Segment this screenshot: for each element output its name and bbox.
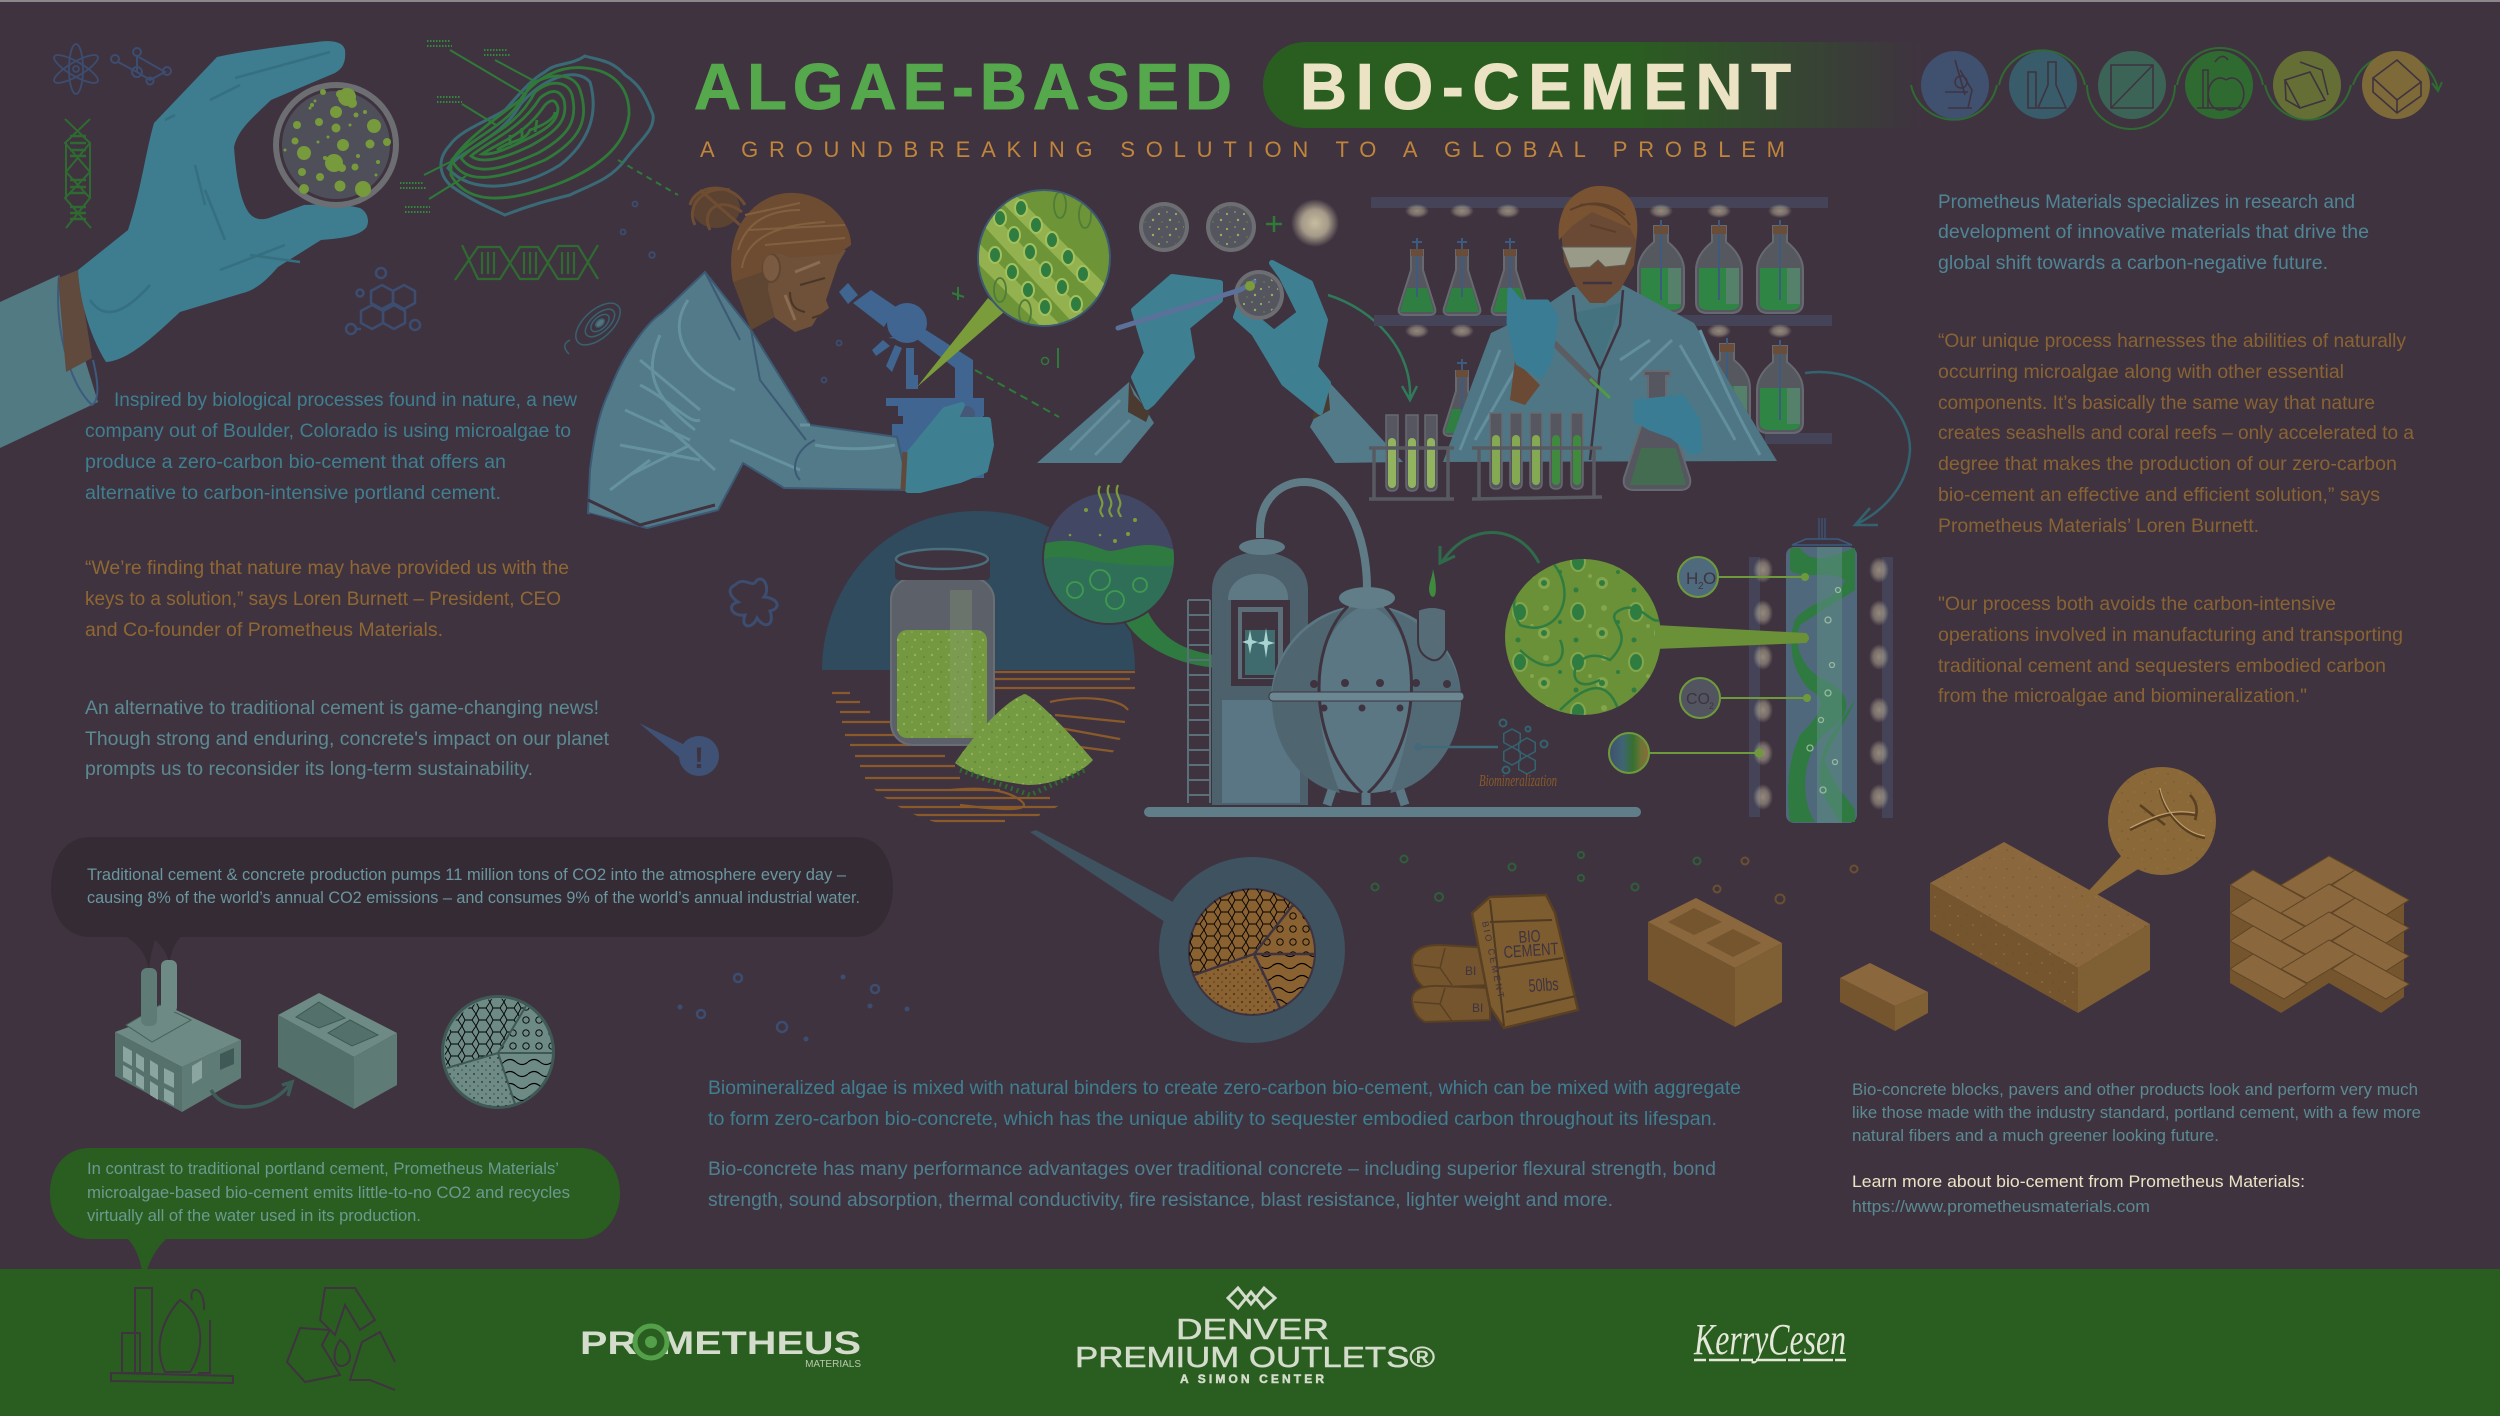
paragraph: about prometheus: global shift towards a carbon-negative future. [1938,253,2328,274]
paragraph: biomineralized [708,1078,1741,1130]
paragraph: quote: “We’re finding that nature may have provided us with the [85,558,569,579]
icon: reactor plant [2185,51,2253,119]
logo: prometheus: MATERIALS [805,1359,861,1370]
dashed line: cell to microscope bubble [618,160,678,195]
paragraph: intro: company out of Boulder, Colorado is using microalgae to [85,421,571,442]
big brick [1930,842,2150,1013]
coat [1443,285,1777,462]
logo: prometheus: PR METHEUS [580,1325,861,1361]
algae tail [1655,625,1809,649]
arrow: algae to reactor [1440,532,1539,563]
quote: process both [1938,594,2403,707]
arrow: shelves to column [1805,372,1910,525]
paragraph: game-changing: An alternative to traditional cement is game-changing news! [85,698,599,719]
bags of bio cement [1412,895,1578,1028]
micro labels [400,41,510,212]
lab illustration: gloved hand with petri dish [0,41,399,448]
paragraph: intro [85,390,577,504]
petri dish [273,82,399,208]
test tube rack 2 [1472,413,1602,499]
paragraph: about prometheus: development of innovative materials that drive the [1938,222,2369,243]
quote: unique process: components. It’s basically the same way that nature [1938,393,2375,414]
bags of bio cement: 50lbs [1528,974,1559,996]
smoke tails [125,936,182,970]
icon: atom [51,44,101,94]
speech bubble tail [917,298,1004,387]
process icon row [1911,48,2442,129]
hands with swab and petri [1037,199,1417,463]
line: CO2 [1720,697,1807,699]
logo: denver premium outlets: DENVER [1176,1314,1329,1346]
drop [1429,569,1436,597]
subtitle: A GROUNDBREAKING SOLUTION TO A GLOBAL PROBLEM [700,137,1785,162]
cuff [58,270,92,372]
logo: denver premium outlets [1075,1288,1435,1386]
label: H2O: O [1703,569,1716,588]
arrow: petri to tubes [1328,295,1417,400]
paragraph: game-changing: prompts us to reconsider its long-term sustainability. [85,759,533,780]
bio-cement products row [1030,767,2409,1043]
icon: spiral cell [565,296,627,354]
quote: process both: from the microalgae and biomineralization." [1938,686,2307,707]
title pill [1263,42,1923,128]
footer band [0,1269,2500,1416]
quote: unique process [1938,331,2414,537]
logo: kerry cesen: KerryCesen [1693,1315,1846,1364]
petri dish 2 [1206,202,1256,252]
glove on microscope [908,405,991,490]
paragraph: advantages [708,1159,1716,1211]
quote: unique process: occurring microalgae along with other essential [1938,362,2344,383]
right glove [1236,263,1328,412]
side tank [1418,607,1446,660]
right sleeve [1310,383,1403,463]
factory to block illustration [115,960,910,1112]
pipe [1260,482,1367,588]
paragraph: quote [85,558,569,641]
ladder [1188,600,1210,803]
microscope [839,283,984,478]
quote: unique process: bio-cement an effective and efficient solution,” says [1938,485,2380,506]
lens [1159,857,1345,1043]
label: H2O: 2 [1698,581,1704,592]
photobioreactor [1505,518,1893,823]
small rings [620,202,887,382]
small bag upper [1412,945,1490,988]
sleeve [0,275,98,448]
quote: process both: traditional cement and sequesters embodied carbon [1938,656,2386,677]
quote: unique process: Prometheus Materials’ Loren Burnett. [1938,516,2259,537]
liquid bubble tail [1122,610,1251,669]
cell callout lines [424,50,536,199]
label: CO2 [1680,678,1720,718]
paragraph: look and perform [1852,1080,2421,1145]
logo: denver premium outlets: PREMIUM OUTLETS® [1075,1342,1435,1374]
liquid bubble [1042,493,1174,625]
shelves [1371,197,1832,444]
cell wavy outer wall [441,56,653,215]
sparkles [1242,628,1275,658]
floating particles [1372,852,1858,904]
center paragraphs [708,1078,1741,1211]
paragraph: intro: produce a zero-carbon bio-cement that offers an [85,452,506,473]
reactor [1144,482,1641,817]
aggregate circle [441,995,555,1109]
title: bio-cement: BIO-CEMENT [1300,50,1791,123]
intro text blocks [85,390,610,780]
microscope view bubble [975,189,1111,335]
factory [115,960,241,1112]
petri dish 1 [1139,202,1189,252]
window [1231,600,1290,686]
left sleeve [1037,382,1154,463]
text: microalgae-based bio-cement emits little-to-no CO2 and recycles [87,1183,570,1202]
paragraph: quote: keys to a solution,” says Loren Burnett – President, CEO [85,589,561,610]
paragraph: look and perform: natural fibers and a much greener looking future. [1852,1126,2219,1145]
green bubble [50,1148,620,1285]
coat hem [588,500,718,536]
test tube rack 1 [1369,415,1454,499]
paragraph: intro: Inspired by biological processes found in nature, a new [114,390,577,411]
arrow factory to block [211,1082,292,1107]
text [87,1159,570,1225]
paragraph: about prometheus [1938,192,2369,274]
mouth [1583,282,1612,284]
swab [1118,282,1254,328]
scientist: man at shelves [1369,186,1910,525]
paragraph: advantages: strength, sound absorption, thermal conductivity, fire resistance, blast resistance, lighter weight and more. [708,1190,1613,1211]
lower right text [1852,1080,2421,1216]
blue backdrop [822,511,1135,670]
small brick [1840,963,1928,1031]
column vessel [1786,518,1857,823]
sphere [1271,605,1461,793]
green culture swirl [1788,548,1855,822]
cell green membranes [451,68,629,198]
face [768,250,846,332]
icon: recycling outline [287,1288,395,1390]
wood grain [832,672,1135,821]
goggles [1562,247,1632,268]
label: biomineralization: Biomineralization [1479,771,1557,790]
ear [762,254,780,282]
molecule biomineral [1500,720,1548,774]
paragraph: game-changing [85,698,610,780]
quote: unique process: “Our unique process harnesses the abilities of naturally [1938,331,2406,352]
big algae circle [1505,559,1661,715]
right column text [1938,192,2414,707]
label: H2O: H [1686,569,1698,588]
legs [1327,790,1405,805]
title block [694,42,1923,162]
bag print: BIO [1518,927,1541,947]
platform [1144,807,1641,817]
title: algae-based: ALGAE-BASED [694,50,1232,123]
small bag lower: BI [1472,1001,1483,1015]
coat highlights [610,300,895,490]
column [1212,552,1308,805]
light spectrum circle [1609,733,1649,773]
text: Traditional cement & concrete production pumps 11 million tons of CO2 into the atmosphere every day – [87,865,847,884]
icon: amoeba [730,579,777,626]
small bag upper: BI [1465,964,1476,978]
bolts [1310,679,1451,712]
left glove [1134,277,1220,407]
algae cell diagram [400,41,653,215]
logo: prometheus [580,1325,861,1370]
light bars [1749,557,1893,818]
icon: horizontal DNA [455,245,598,280]
hair [1559,186,1637,240]
bags of bio cement: CEMENT [1503,939,1559,962]
bare arm [1510,360,1540,405]
dashed line and marks [975,370,1059,417]
line: light spectrum [1649,752,1759,754]
paragraph: biomineralized: Biomineralized algae is mixed with natural binders to create zero-carbon bio-cement, which can be mixed with aggregate [708,1078,1741,1099]
glove holding flask [1636,397,1700,452]
icon: hexagon molecule [346,268,420,334]
paragraph: look and perform: like those made with the industry standard, portland cement, with a few more [1852,1103,2421,1122]
url: https://www.prometheusmaterials.com [1852,1197,2150,1216]
shelf lights [1405,204,1792,338]
pipette [1554,343,1596,385]
quote: unique process: degree that makes the production of our zero-carbon [1938,454,2397,475]
label: H2O [1678,557,1718,597]
text: causing 8% of the world’s annual CO2 emissions – and consumes 9% of the world’s annual industrial water. [87,888,860,907]
footer [0,1269,2500,1416]
paragraph: quote: and Co-founder of Prometheus Materials. [85,620,443,641]
text [87,865,860,907]
text: In contrast to traditional portland cement, Prometheus Materials’ [87,1159,559,1178]
science doodles [51,41,887,382]
learn more: Learn more about bio-cement from Prometheus Materials: [1852,1172,2305,1191]
light glows [1753,557,1889,810]
icon: bioreactor panel [2098,51,2166,119]
paragraph: advantages: Bio-concrete has many performance advantages over traditional concrete – including superior flexural strength, bond [708,1159,1716,1180]
concrete block [278,993,397,1109]
quote: process both: "Our process both avoids the carbon-intensive [1938,594,2336,615]
bags of bio cement: BIO CEMENT [1480,920,1506,999]
dark bubble [51,837,893,937]
icon: plant outline [111,1288,233,1383]
paragraph: look and perform: Bio-concrete blocks, pavers and other products look and perform very much [1852,1080,2418,1099]
icon: block [2362,51,2430,119]
process arcs [1911,48,2442,129]
line: H2O [1718,576,1805,578]
lens tail [1030,830,1173,922]
label: CO2: 2 [1709,701,1714,711]
glove [78,41,368,362]
quote: process both: operations involved in manufacturing and transporting [1938,625,2403,646]
pavers [2230,856,2409,1013]
powder pile [955,694,1093,795]
paragraph: game-changing: Though strong and enduring, concrete's impact on our planet [85,729,610,750]
logo: denver premium outlets: A SIMON CENTER [1180,1372,1324,1386]
hair [731,193,851,282]
steam [1099,485,1121,517]
callout: traditional cement [51,837,893,970]
concrete block [1648,898,1782,1027]
icon: molecule links [111,48,171,84]
icon: exclamation bubble: ! [694,742,704,775]
floating dots [697,974,879,1032]
icon: exclamation bubble [639,723,719,776]
paragraph: intro: alternative to carbon-intensive portland cement. [85,483,501,504]
icon: microscope [1921,51,1989,119]
petri in hand [1234,270,1284,320]
icon: flasks [2009,51,2077,119]
glow [1291,199,1339,247]
paragraph: biomineralized: to form zero-carbon bio-concrete, which has the unique ability to sequester embodied carbon throughout its lifespan. [708,1109,1717,1130]
neck [733,262,775,330]
glove with pipette [1509,290,1556,376]
callout: prometheus bio-cement [50,1148,620,1285]
fossil magnifier [2068,767,2216,913]
jar and powder scene [822,485,1251,821]
icon: vertical DNA [65,119,91,228]
small bag lower [1412,986,1490,1022]
hair bun [690,188,745,230]
label: CO2: CO [1686,691,1710,708]
plus sign [1266,216,1282,232]
outlet to molecule [1418,746,1498,748]
coat [588,272,909,528]
paragraph: about prometheus: Prometheus Materials specializes in research and [1938,192,2355,213]
algae colonies [284,88,391,197]
coat lapel and shirt [1573,303,1621,367]
icon: bags [2273,51,2341,119]
jar [891,549,994,745]
tall bag [1472,895,1578,1028]
shelf flasks and bottles [1399,220,1803,436]
erlenmeyer flask [1624,371,1690,490]
bubbles [1807,588,1840,793]
quote: unique process: creates seashells and coral reefs – only accelerated to a [1938,423,2414,444]
text: virtually all of the water used in its production. [87,1206,421,1225]
head [1561,187,1637,303]
bio-cement composition circle [1188,888,1316,1016]
scientist: woman at microscope [588,188,1111,536]
